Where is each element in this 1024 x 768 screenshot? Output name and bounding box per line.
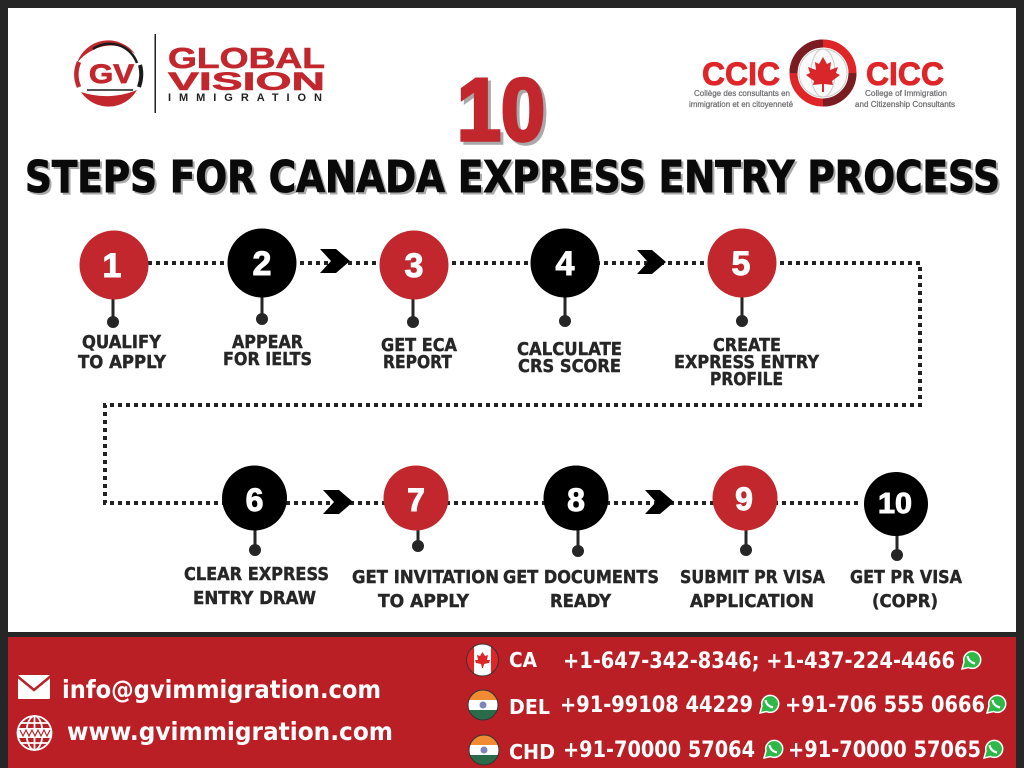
footer panel [8, 637, 1016, 768]
icon: envelope [17, 675, 51, 699]
heading number: 10: 10 [457, 60, 545, 159]
icon: maple leaf ring [794, 44, 852, 102]
contact: Chandigarh phone 1: +91-70000 57064 [563, 738, 755, 763]
contact: email: info@gvimmigration.com [62, 675, 381, 704]
step 6: CLEAR EXPRESS [184, 564, 329, 585]
contact: Canada phones: +1-647-342-8346; +1-437-224-4466 [563, 649, 955, 674]
step 1: TO APPLY [78, 352, 167, 373]
step 7 [352, 466, 499, 612]
step 8: GET DOCUMENTS [503, 567, 659, 588]
icon: whatsapp [760, 695, 779, 713]
logo: Global Vision Immigration: VISION [168, 68, 325, 96]
step 6: 6 [246, 482, 263, 518]
step 6: ENTRY DRAW [193, 588, 316, 609]
icon: GV emblem: GV [89, 59, 134, 89]
logo: Global Vision Immigration: GLOBAL [168, 43, 325, 75]
contact: website: www.gvimmigration.com [67, 717, 393, 746]
step 2: APPEAR [232, 332, 303, 353]
contact: Canada label: CA [509, 648, 537, 672]
step 6 [184, 466, 329, 609]
flag: Canada [466, 644, 499, 676]
contact: Delhi label: DEL [509, 695, 550, 719]
step 1: 1 [103, 247, 121, 285]
arrow: step 6 to 7 [323, 490, 353, 514]
arrow: step 2 to 3 [320, 249, 350, 273]
step 5: CREATE [713, 335, 781, 356]
step 3 [380, 230, 457, 373]
step 10: 10 [878, 488, 912, 520]
icon: whatsapp [962, 651, 981, 669]
step 9: 9 [735, 481, 753, 517]
step 10 [850, 472, 962, 612]
step 9: SUBMIT PR VISA [680, 567, 825, 588]
logo: CCIC / CICC: CCIC [702, 56, 780, 92]
step 2 [223, 228, 312, 370]
step 8: 8 [567, 482, 585, 518]
arrow: step 8 to 9 [645, 490, 674, 514]
step 10: (COPR) [872, 591, 938, 612]
step 5 [674, 228, 820, 390]
icon: whatsapp [764, 740, 783, 758]
contact: Chandigarh label: CHD [509, 740, 555, 764]
logo: CCIC / CICC: and Citizenship Consultants [855, 99, 955, 109]
step 4: CRS SCORE [518, 356, 621, 377]
icon: GV emblem [76, 40, 141, 107]
icon: globe www [18, 716, 52, 750]
step 9: APPLICATION [690, 591, 814, 612]
step 1: QUALIFY [82, 332, 162, 353]
step 8 [503, 466, 659, 612]
step 10: GET PR VISA [850, 567, 962, 588]
icon: whatsapp [987, 695, 1006, 713]
contact: Delhi phone 1: +91-99108 44229 [560, 693, 753, 718]
step 3: 3 [405, 247, 423, 285]
flag: India (Delhi) [468, 690, 498, 720]
contact: Chandigarh phone 2: +91-70000 57065 [788, 738, 981, 763]
step 5: 5 [732, 245, 750, 283]
icon: whatsapp [984, 740, 1003, 758]
step 7: GET INVITATION [352, 567, 499, 588]
dotted process path [105, 263, 920, 503]
white content panel [8, 8, 1016, 632]
step 5: EXPRESS ENTRY [674, 352, 820, 373]
heading number: 10: 10 [460, 63, 548, 162]
step 8: READY [550, 591, 612, 612]
logo: CCIC / CICC: immigration et en citoyenneté [689, 99, 793, 109]
contact: Delhi phone 2: +91-706 555 0666 [785, 693, 985, 718]
step 4: 4 [556, 245, 575, 283]
logo: CCIC / CICC: College of Immigration [865, 88, 947, 98]
logo: CCIC / CICC [689, 44, 955, 109]
logo: Global Vision Immigration: IMMIGRATION [168, 92, 322, 104]
step 9 [680, 466, 825, 612]
logo: Global Vision Immigration [76, 34, 325, 113]
logo: CCIC / CICC: CICC [866, 56, 944, 92]
step 1 [78, 230, 167, 373]
step 7: TO APPLY [378, 591, 470, 612]
step 5: PROFILE [710, 369, 783, 390]
step 4 [517, 228, 622, 377]
step 4: CALCULATE [517, 339, 622, 360]
step 2: FOR IELTS [223, 349, 312, 370]
step 3: REPORT [383, 352, 453, 373]
flag: India (Chandigarh) [469, 735, 499, 765]
step 2: 2 [253, 245, 271, 283]
step 7: 7 [407, 482, 425, 518]
arrow: step 4 to 5 [637, 250, 666, 274]
logo: CCIC / CICC: Collège des consultants en [694, 88, 790, 98]
step 3: GET ECA [381, 335, 457, 356]
